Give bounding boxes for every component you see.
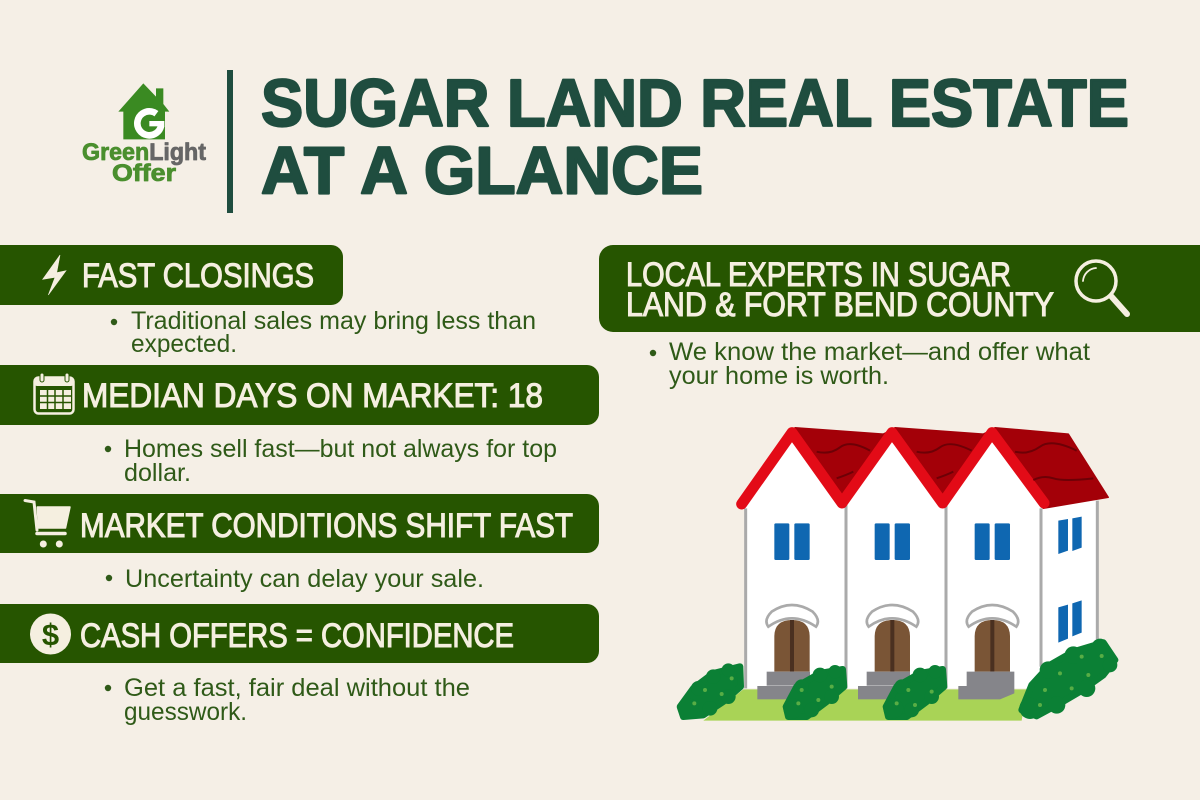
panel: market conditions (0, 494, 599, 593)
bullet text (105, 435, 557, 487)
icon: magnifying glass (1076, 261, 1127, 314)
bushes (678, 639, 1117, 719)
title: SUGAR LAND REAL ESTATE (261, 66, 1129, 141)
roof edge (742, 433, 1044, 504)
banner (0, 245, 343, 305)
bush 1 (678, 663, 741, 718)
illustration: row of townhouses (678, 428, 1117, 721)
lawn (703, 689, 1027, 721)
front walls (745, 442, 1042, 688)
bullet text: Homes sell fast—but not always for top (124, 435, 557, 463)
dark red roof (792, 428, 1108, 508)
banner (599, 245, 1200, 332)
bush 4 (1019, 639, 1117, 719)
banner (0, 604, 599, 663)
bullet text: Traditional sales may bring less than (131, 307, 536, 335)
heading: LAND & FORT BEND COUNTY (626, 286, 1054, 324)
banner (0, 365, 599, 425)
icon: shopping cart (25, 500, 70, 548)
title: AT A GLANCE (261, 134, 703, 208)
bullet text (105, 674, 470, 726)
bush highlights (692, 654, 1104, 707)
icon: calendar (34, 373, 74, 414)
heading: CASH OFFERS = CONFIDENCE (80, 617, 514, 655)
panel: cash offers (0, 604, 599, 726)
heading: LOCAL EXPERTS IN SUGAR (626, 256, 1011, 294)
bush 3 (883, 665, 944, 718)
bullet text: Get a fast, fair deal without the (124, 674, 470, 702)
icon: dollar coin: $ (42, 617, 59, 652)
doors and arches (766, 605, 1018, 672)
bullet text: your home is worth. (669, 362, 889, 390)
title (261, 66, 1129, 208)
panel: fast closings (0, 245, 536, 358)
bullet text (111, 307, 536, 358)
logo: GreenLight Offer (82, 83, 206, 187)
heading: MEDIAN DAYS ON MARKET: 18 (82, 377, 543, 415)
panel: local experts (599, 245, 1200, 390)
front steps (757, 672, 1014, 699)
bullet text: guesswork. (124, 698, 247, 726)
bush 2 (783, 665, 844, 718)
panel: median days on market (0, 365, 599, 487)
icon: lightning bolt (43, 255, 66, 295)
bullet text: Uncertainty can delay your sale. (125, 565, 484, 593)
windows (774, 517, 1082, 643)
banner (0, 494, 599, 553)
roof shingle lines (817, 443, 1093, 480)
heading (626, 256, 1054, 324)
icon: dollar coin (30, 614, 71, 654)
icon: logo house (118, 83, 169, 139)
bullet text (650, 338, 1090, 390)
bullet text: expected. (131, 330, 237, 358)
logo: GreenLight Offer: Offer (112, 160, 176, 187)
heading: MARKET CONDITIONS SHIFT FAST (80, 507, 573, 545)
bullet text: dollar. (124, 459, 191, 487)
bullet text: We know the market—and offer what (669, 338, 1090, 366)
logo wordmark: GreenLight (82, 139, 206, 166)
heading: FAST CLOSINGS (82, 257, 314, 295)
side wall (1042, 500, 1097, 667)
